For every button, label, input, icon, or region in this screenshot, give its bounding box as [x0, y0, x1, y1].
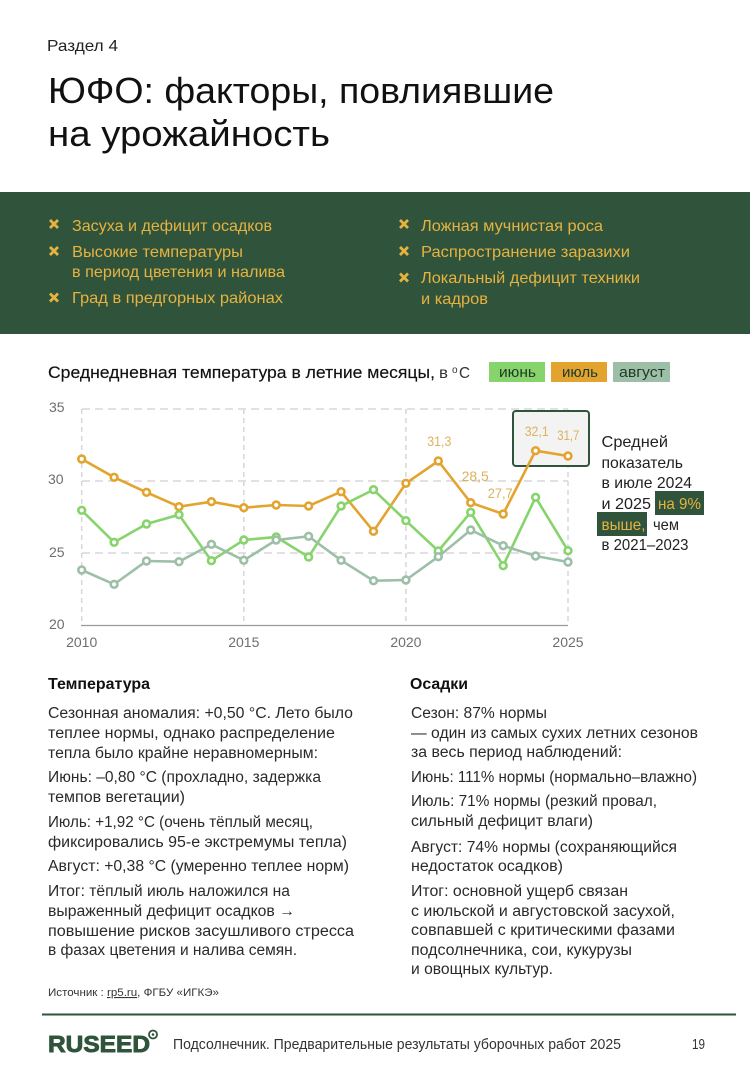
text block: precipitation: [410, 676, 698, 978]
value labels: 31,7: [557, 427, 579, 443]
callout: выше,: [602, 517, 646, 534]
y axis labels: [48, 399, 65, 632]
precipitation body: и овощных культур.: [411, 961, 553, 978]
precipitation body: [411, 705, 698, 978]
temperature body: тепла было крайне неравномерным:: [48, 745, 318, 762]
title: на урожайность: [48, 113, 330, 154]
precipitation body: Сезон: 87% нормы: [411, 705, 547, 722]
precipitation body: Август: 74% нормы (сохраняющийся: [411, 839, 677, 856]
y axis labels: 25: [49, 544, 65, 560]
temperature body: выраженный дефицит осадков →: [48, 903, 295, 920]
factor list left: [50, 218, 285, 307]
series: June: [78, 486, 571, 569]
callout: в июле 2024: [602, 475, 692, 492]
value labels: 28,5: [462, 468, 489, 484]
value labels: 31,3: [427, 433, 451, 449]
x axis labels: 2020: [390, 634, 422, 650]
series: July: [78, 447, 571, 535]
temperature body: повышение рисков засушливого стресса: [48, 923, 354, 940]
temperature body: Июнь: –0,80 °С (прохладно, задержка: [48, 769, 321, 786]
source: Источник : rp5.ru, ФГБУ «ИГКЭ»: [48, 987, 219, 999]
section label: Раздел 4: [47, 38, 118, 55]
temperature body: теплее нормы, однако распределение: [48, 725, 335, 742]
legend: июль: [562, 364, 598, 381]
factor list right: Распространение заразихи: [421, 244, 630, 261]
precipitation body: подсолнечника, сои, кукурузы: [411, 942, 632, 959]
panel: factors: [0, 192, 750, 334]
precipitation body: Июнь: 111% нормы (нормально–влажно): [411, 769, 697, 786]
title: ЮФО: факторы, повлиявшие: [48, 70, 554, 111]
x axis labels: [66, 634, 584, 650]
legend: [489, 362, 670, 382]
factor list right: Ложная мучнистая роса: [421, 218, 603, 235]
precipitation body: Июль: 71% нормы (резкий провал,: [411, 793, 657, 810]
text block: temperature: [48, 676, 354, 959]
precipitation body: за весь период наблюдений:: [411, 744, 622, 761]
temperature body: Июль: +1,92 °С (очень тёплый месяц,: [48, 814, 313, 831]
y axis labels: 35: [49, 399, 65, 415]
chart heading: Среднедневная температура в летние месяцы,: [48, 364, 435, 382]
precipitation body: Итог: основной ущерб связан: [411, 883, 628, 900]
factor list left: Высокие температуры: [72, 244, 243, 261]
precipitation body: с июльской и августовской засухой,: [411, 903, 675, 920]
temperature body: [48, 705, 354, 959]
factor list left: Град в предгорных районах: [72, 290, 283, 307]
precipitation body: сильный дефицит влаги): [411, 813, 593, 830]
temperature body: Сезонная аномалия: +0,50 °С. Лето было: [48, 705, 353, 722]
chart heading: в: [439, 365, 448, 382]
temperature body: фиксировались 95-е экстремумы тепла): [48, 834, 347, 851]
precipitation body: — один из самых сухих летних сезонов: [411, 725, 698, 742]
legend: июнь: [499, 364, 536, 381]
value labels: 32,1: [525, 423, 549, 439]
footer: [42, 1014, 736, 1057]
legend: август: [619, 364, 665, 381]
footer caption: Подсолнечник. Предварительные результаты уборочных работ 2025: [173, 1037, 621, 1053]
chart heading: С: [459, 365, 470, 382]
callout: чем: [653, 517, 679, 534]
temperature body: в фазах цветения и налива семян.: [48, 942, 297, 959]
callout: [597, 434, 704, 554]
temperature body: Итог: тёплый июль наложился на: [48, 883, 290, 900]
y axis labels: 30: [48, 471, 64, 487]
temperature body: Август: +0,38 °С (умеренно теплее норм): [48, 858, 349, 875]
logo: RUSEED: [48, 1031, 150, 1057]
y axis labels: 20: [49, 616, 65, 632]
factor list left: Засуха и дефицит осадков: [72, 218, 272, 235]
callout: в 2021–2023: [602, 537, 689, 554]
callout: Средней: [602, 434, 668, 451]
precipitation body: совпавшей с критическими фазами: [411, 922, 675, 939]
title: [48, 70, 554, 154]
value labels: [427, 423, 579, 501]
callout: и 2025: [602, 496, 651, 513]
heading: temperature: Температура: [48, 676, 150, 693]
factor list right: Локальный дефицит техники: [421, 270, 640, 287]
callout: показатель: [602, 455, 683, 472]
series: August: [78, 527, 571, 588]
line chart: [48, 399, 589, 650]
heading: precipitation: Осадки: [410, 676, 468, 693]
precipitation body: недостаток осадков): [411, 858, 563, 875]
x axis labels: 2015: [228, 634, 260, 650]
factor list left: в период цветения и налива: [72, 264, 285, 281]
value labels: 27,7: [488, 485, 513, 501]
page number: 19: [692, 1037, 705, 1053]
factor list right: [400, 218, 640, 308]
factor list right: и кадров: [421, 291, 488, 308]
x axis labels: 2025: [552, 634, 584, 650]
callout: на 9%: [658, 496, 701, 513]
highlight box: [513, 411, 589, 466]
chart heading: о: [452, 365, 458, 376]
temperature body: темпов вегетации): [48, 789, 185, 806]
x axis labels: 2010: [66, 634, 97, 650]
